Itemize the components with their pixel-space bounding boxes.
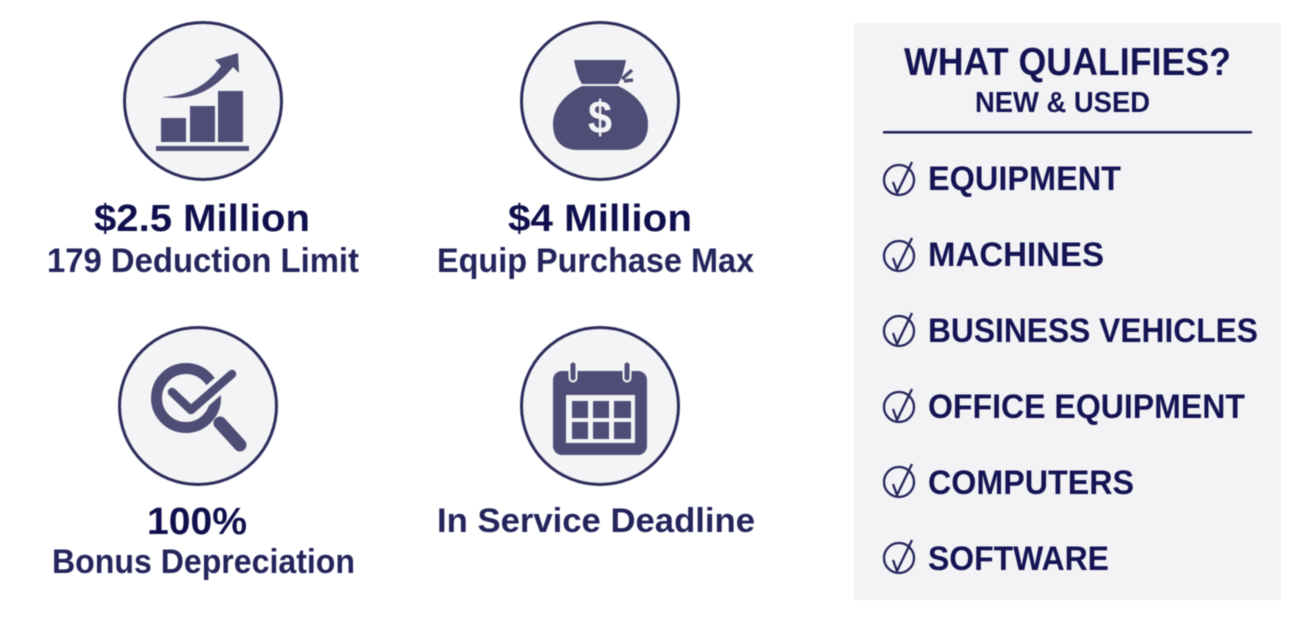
list item: office equipment: OFFICE EQUIPMENT bbox=[928, 388, 1245, 426]
icon: money bag: $ bbox=[588, 91, 612, 143]
panel: 179 deduction limit bbox=[47, 22, 359, 280]
panel: what qualifies bbox=[854, 23, 1281, 600]
icon: calendar bbox=[522, 328, 678, 484]
label: Bonus Depreciation bbox=[52, 543, 355, 581]
value: $4 Million bbox=[508, 198, 692, 240]
label: 179 Deduction Limit bbox=[47, 242, 359, 280]
value: 100% bbox=[147, 501, 247, 543]
label: In Service Deadline bbox=[437, 502, 755, 540]
list item: software: SOFTWARE bbox=[928, 540, 1109, 578]
list item: computers: COMPUTERS bbox=[928, 464, 1134, 502]
panel: in service deadline bbox=[437, 328, 755, 540]
icon: magnifier with check mark bbox=[120, 328, 276, 484]
list item: equipment: EQUIPMENT bbox=[928, 160, 1121, 198]
subheading: NEW & USED bbox=[975, 87, 1150, 119]
panel: bonus depreciation bbox=[52, 328, 355, 581]
icon: rising bar chart bbox=[124, 22, 282, 180]
panel: equipment purchase max bbox=[437, 22, 754, 280]
label: Equip Purchase Max bbox=[437, 242, 754, 280]
heading: WHAT QUALIFIES? bbox=[904, 41, 1231, 84]
icon: money bag bbox=[522, 22, 678, 180]
list item: machines: MACHINES bbox=[928, 236, 1104, 274]
list item: business vehicles: BUSINESS VEHICLES bbox=[928, 312, 1258, 350]
value: $2.5 Million bbox=[94, 198, 310, 240]
